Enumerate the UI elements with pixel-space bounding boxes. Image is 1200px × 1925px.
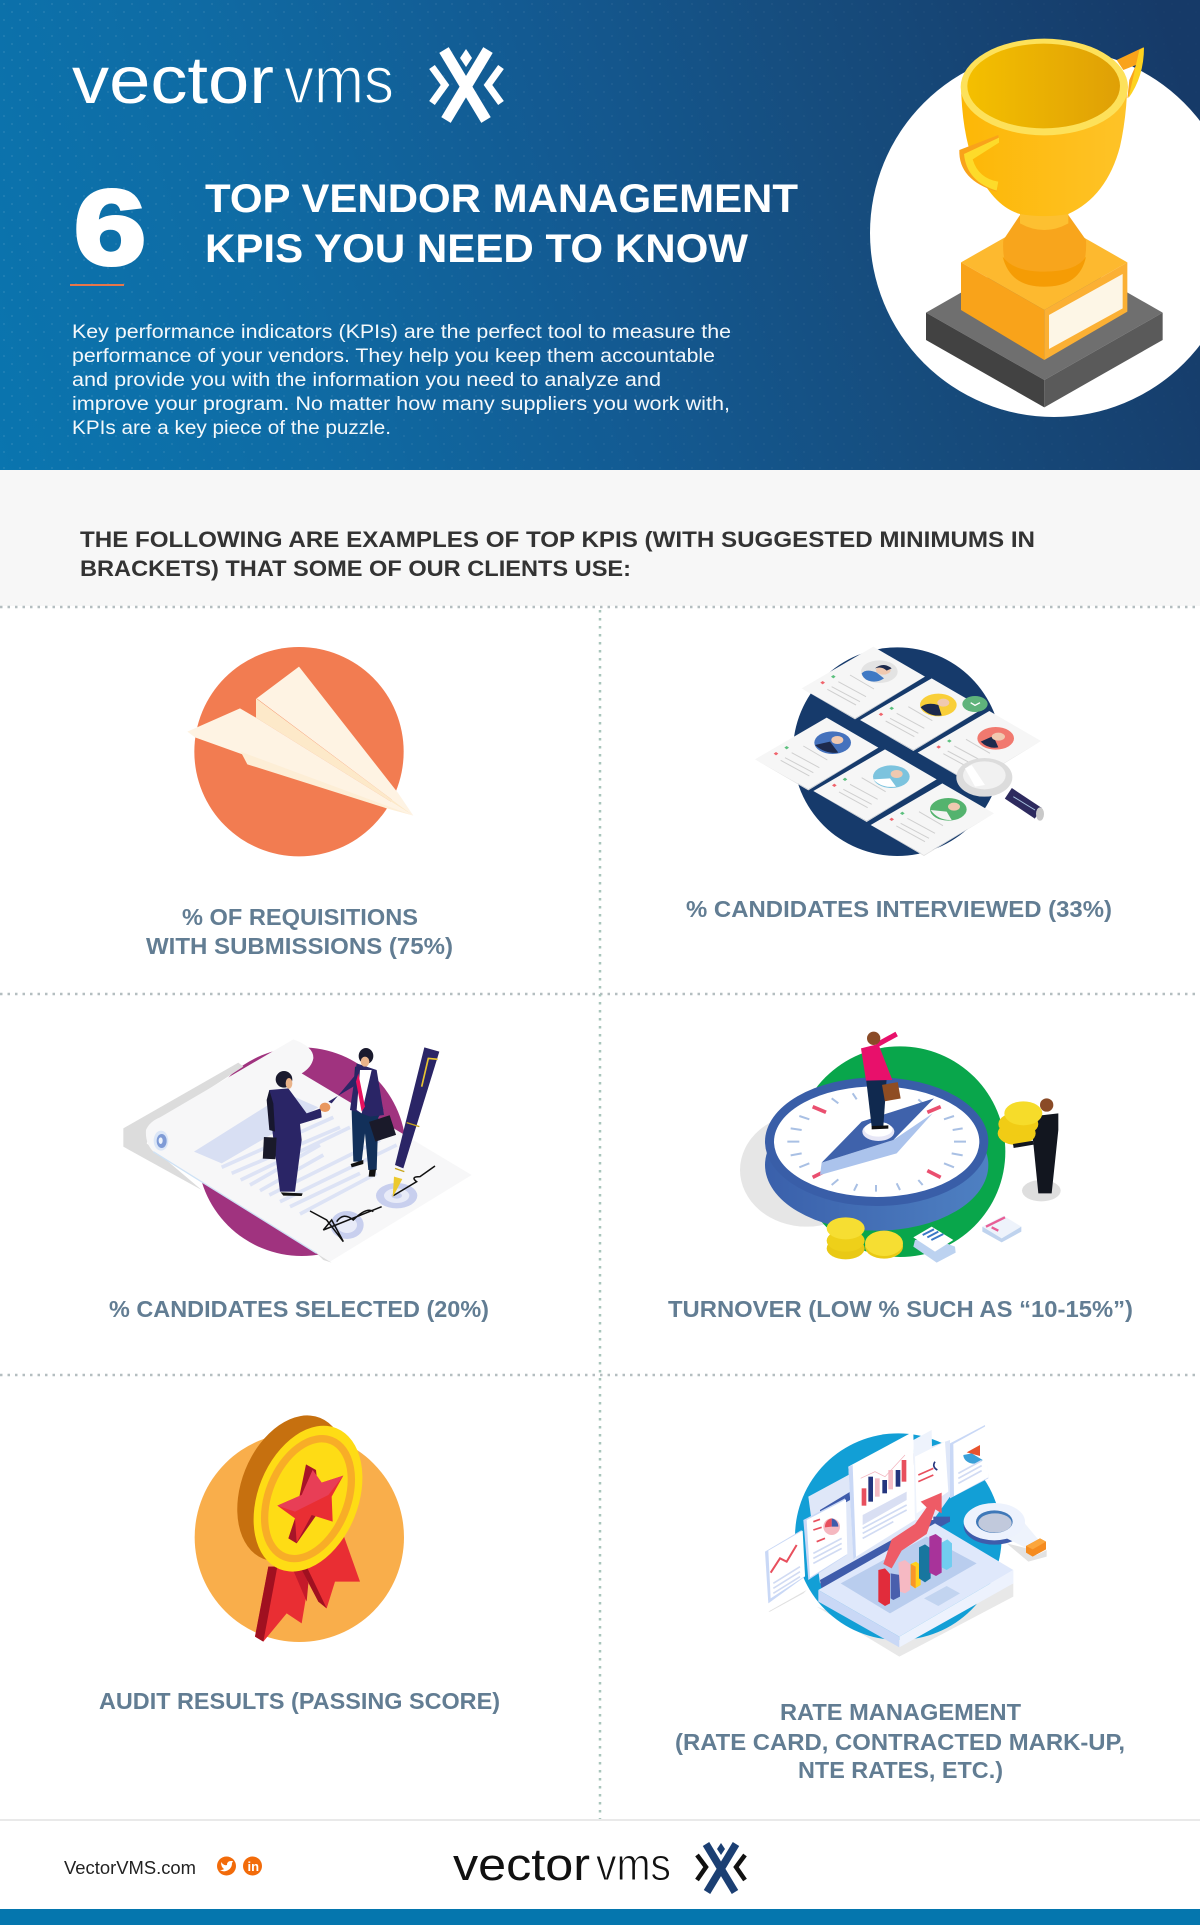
label: % OF REQUISITIONS xyxy=(182,904,418,930)
logo: vectorvms white: vector xyxy=(72,43,274,118)
logo: vectorvms dark: vms xyxy=(596,1839,671,1890)
label: WITH SUBMISSIONS (75%) xyxy=(146,933,453,959)
panel: candidates selected xyxy=(109,1039,489,1322)
title: TOP VENDOR MANAGEMENT xyxy=(205,177,798,221)
orange rule xyxy=(70,284,124,286)
panel: candidates interviewed xyxy=(686,647,1112,922)
section heading: BRACKETS) THAT SOME OF OUR CLIENTS USE: xyxy=(80,556,631,581)
icon: compass with people and coins xyxy=(740,1032,1061,1263)
icon: linkedin: in xyxy=(248,1859,259,1874)
footer xyxy=(0,1819,1200,1892)
icon: candidate cards with magnifier xyxy=(755,647,1044,856)
big number 6: 6 xyxy=(74,169,146,287)
logo: vectorvms white: vms xyxy=(284,43,394,118)
intro paragraph xyxy=(72,322,731,439)
panel: audit results xyxy=(99,1399,500,1714)
header banner xyxy=(0,0,1200,470)
panel: rate management xyxy=(675,1425,1125,1783)
icon: paper plane xyxy=(187,647,413,856)
label xyxy=(675,1699,1125,1783)
icon: linkedin xyxy=(243,1856,262,1876)
intro paragraph: KPIs are a key piece of the puzzle. xyxy=(72,418,391,439)
logo: vectorvms white xyxy=(72,43,501,120)
logo: vectorvms dark xyxy=(453,1839,745,1892)
intro band xyxy=(0,470,1200,606)
label: (RATE CARD, CONTRACTED MARK-UP, xyxy=(675,1729,1125,1755)
section heading xyxy=(80,527,1035,581)
icon: handshake on contract xyxy=(123,1039,472,1263)
panel: requisitions with submissions xyxy=(146,647,453,959)
label xyxy=(146,904,453,959)
panel: turnover xyxy=(668,1032,1133,1322)
label: AUDIT RESULTS (PASSING SCORE) xyxy=(99,1688,500,1714)
intro paragraph: improve your program. No matter how many suppliers you work with, xyxy=(72,394,730,415)
title xyxy=(205,177,798,271)
title: KPIS YOU NEED TO KNOW xyxy=(205,227,748,271)
intro paragraph: Key performance indicators (KPIs) are the perfect tool to measure the xyxy=(72,322,731,343)
label: % CANDIDATES SELECTED (20%) xyxy=(109,1296,489,1322)
logo: vectorvms dark: vector xyxy=(453,1839,590,1890)
section heading: THE FOLLOWING ARE EXAMPLES OF TOP KPIS (WITH SUGGESTED MINIMUMS IN xyxy=(80,527,1035,552)
website address: VectorVMS.com xyxy=(64,1858,196,1878)
bottom bar xyxy=(0,1909,1200,1925)
label: RATE MANAGEMENT xyxy=(780,1699,1021,1725)
icon: medal with star xyxy=(195,1399,404,1642)
label: NTE RATES, ETC.) xyxy=(798,1757,1003,1783)
icon: trophy on white circle xyxy=(870,39,1200,417)
icon: laptop with charts xyxy=(765,1425,1047,1657)
icon: twitter xyxy=(217,1856,236,1876)
intro paragraph: performance of your vendors. They help you keep them accountable xyxy=(72,346,715,367)
label: TURNOVER (LOW % SUCH AS “10-15%”) xyxy=(668,1296,1133,1322)
label: % CANDIDATES INTERVIEWED (33%) xyxy=(686,896,1112,922)
intro paragraph: and provide you with the information you need to analyze and xyxy=(72,370,661,391)
